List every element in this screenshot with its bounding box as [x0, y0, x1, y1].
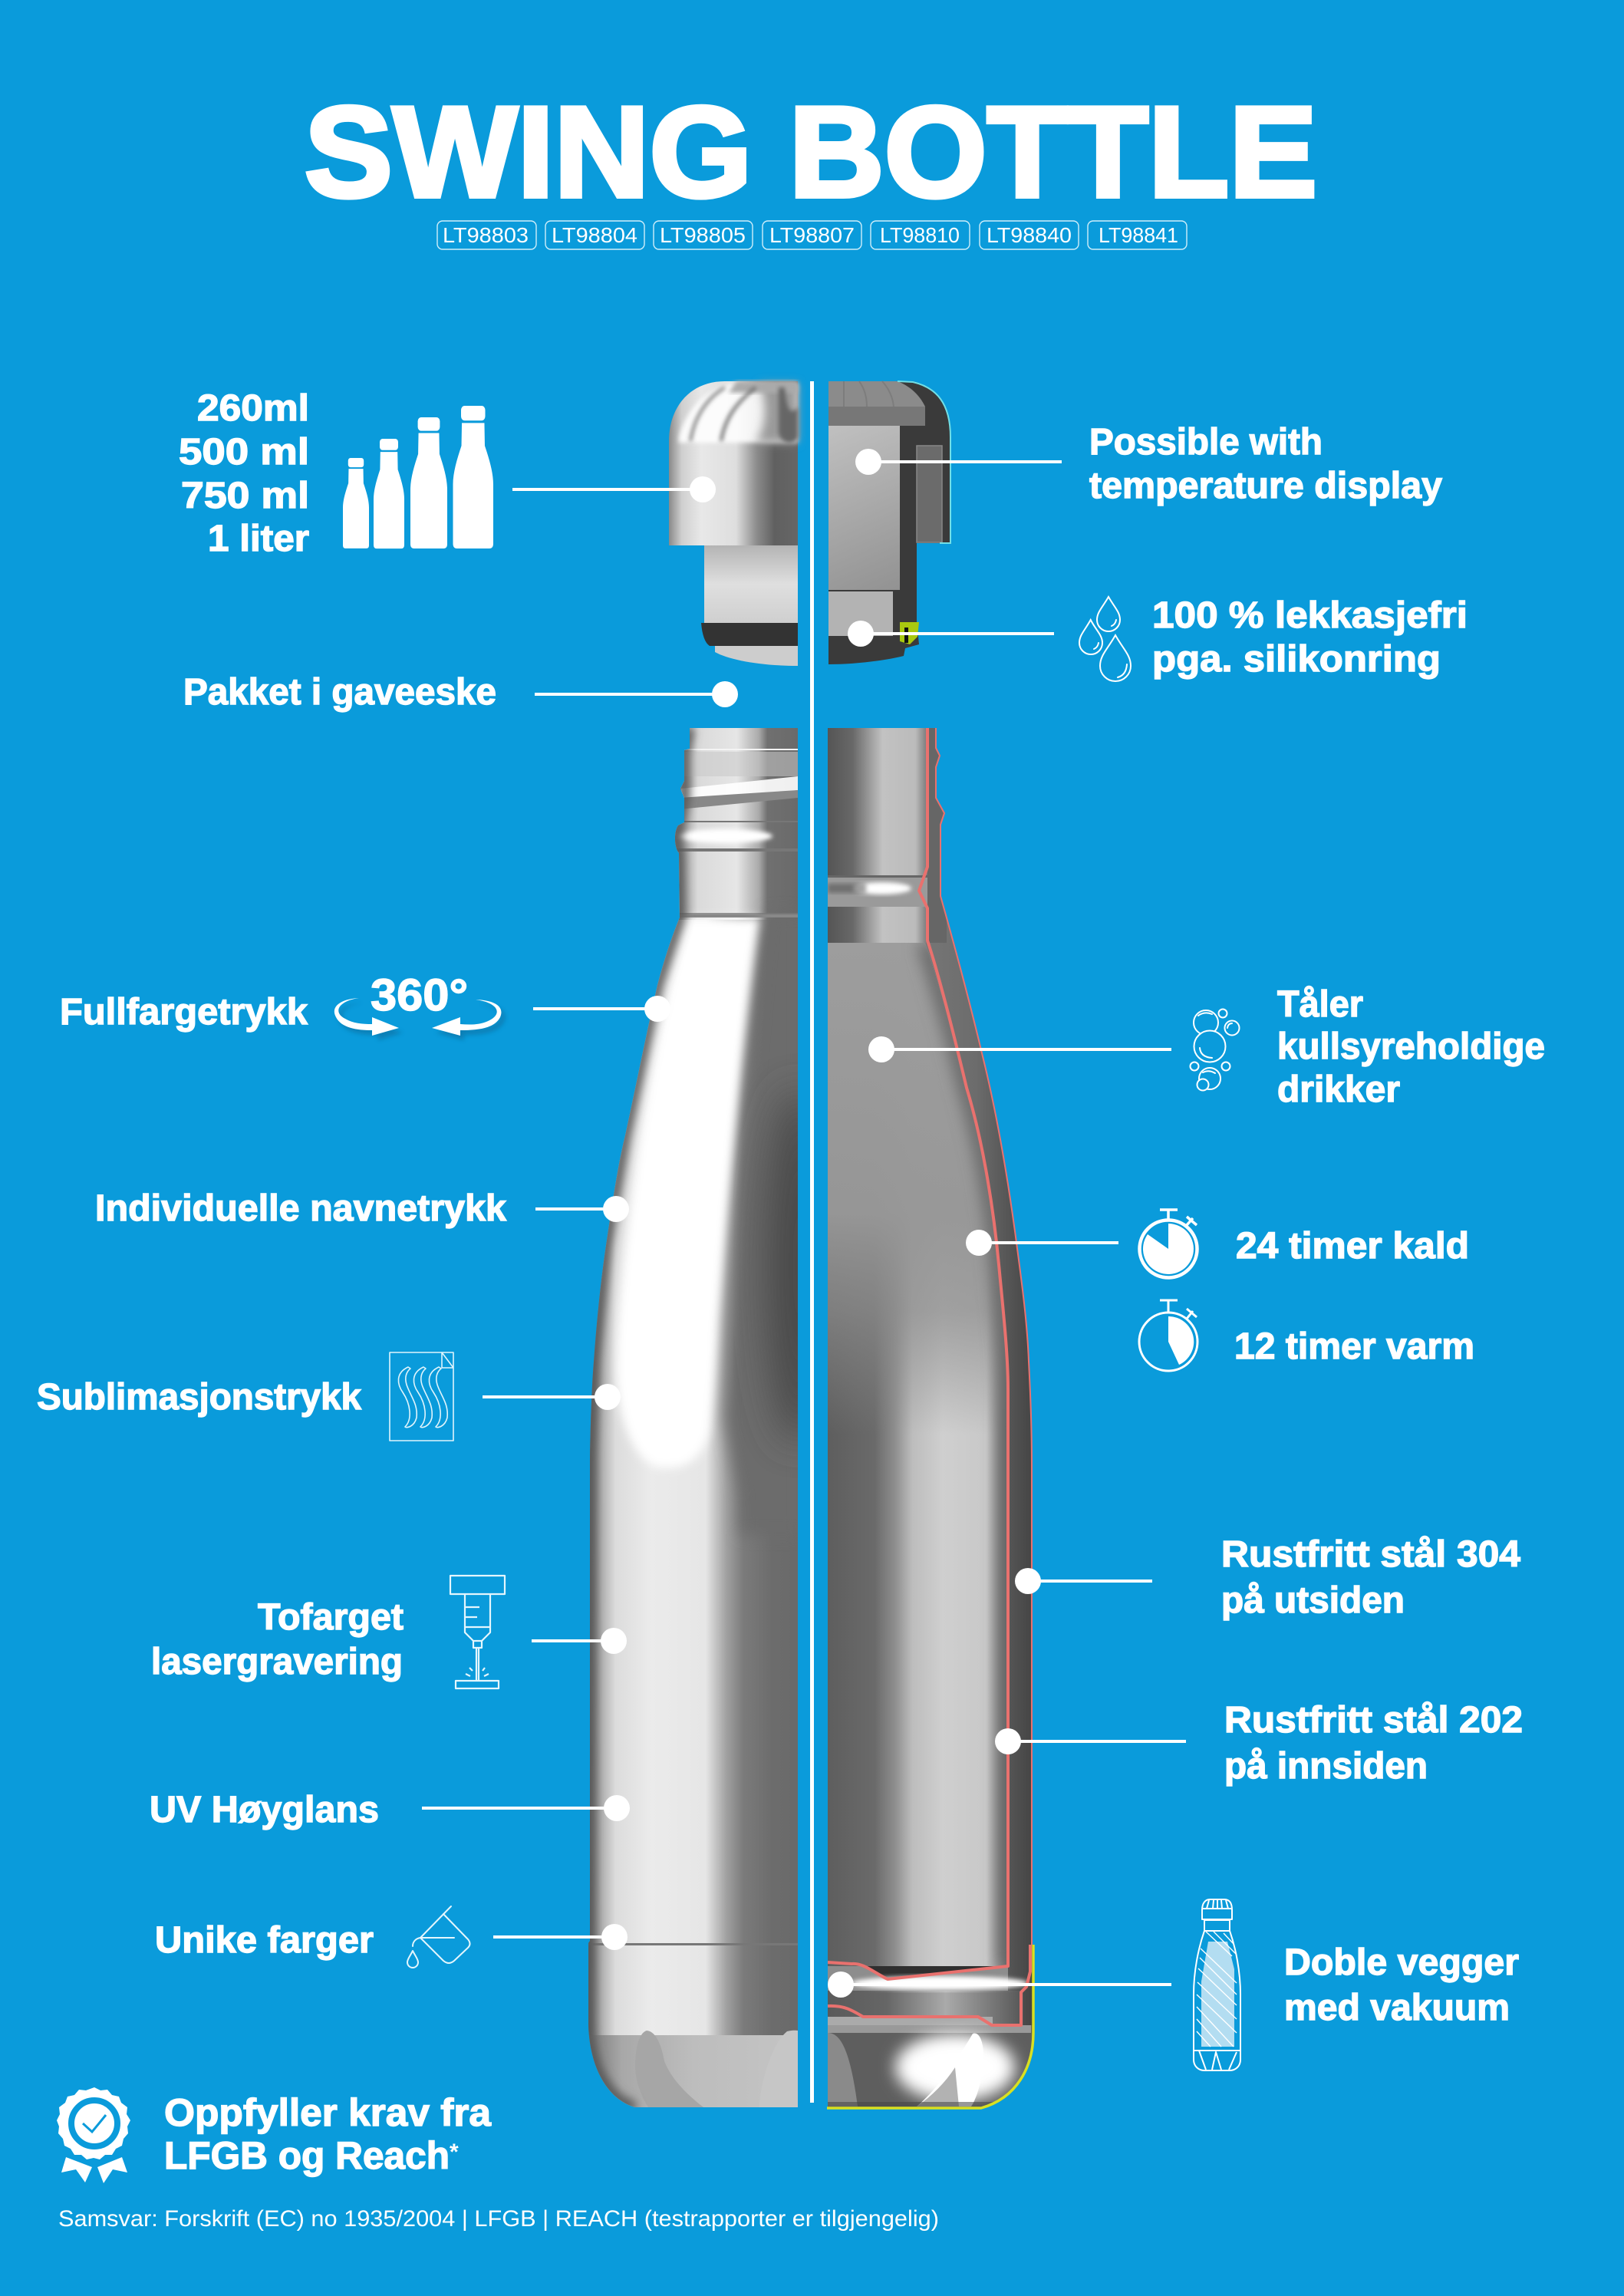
- compliance heading: *: [450, 2140, 459, 2165]
- label: double walls with vacuum: med vakuum: [1284, 1988, 1510, 2028]
- icon: bubbles: [1191, 1010, 1240, 1091]
- product code tags: LT98810: [880, 223, 960, 247]
- label: two-colour laser engraving: lasergravering: [151, 1642, 403, 1682]
- label: individual names: Individuelle navnetrykk: [95, 1188, 506, 1229]
- icon: 360 degrees: [334, 970, 505, 1040]
- label: carbonated drinks: drikker: [1277, 1069, 1400, 1110]
- product code tags: LT98804: [552, 223, 637, 247]
- product code tags: LT98803: [443, 223, 529, 247]
- label: 24 hours cold: 24 timer kald: [1236, 1226, 1469, 1267]
- label: double walls with vacuum: [1284, 1942, 1519, 2028]
- label: leak-proof: [1152, 595, 1468, 680]
- left bottle cap exterior: [669, 381, 798, 666]
- icon: water drops: [1079, 597, 1131, 681]
- icon: four bottle sizes: [343, 406, 493, 548]
- icon: laser engraver: [450, 1576, 505, 1688]
- product code tags: [437, 221, 1187, 249]
- product code tags: LT98841: [1099, 223, 1178, 247]
- compliance footnote: Samsvar: Forskrift (EC) no 1935/2004 | LFGB | REACH (testrapporter er tilgjengelig): [58, 2206, 939, 2232]
- label: carbonated drinks: [1277, 984, 1545, 1110]
- label: stainless steel 202: Rustfritt stål 202: [1224, 1700, 1523, 1741]
- compliance heading: Oppfyller krav fra: [164, 2091, 492, 2134]
- icon: double wall bottle: [1194, 1899, 1240, 2070]
- label: leak-proof: 100 % lekkasjefri: [1152, 595, 1468, 636]
- label: unique colours: Unike farger: [155, 1920, 374, 1961]
- label: carbonated drinks: kullsyreholdige: [1277, 1026, 1545, 1067]
- label: stainless steel 202: på innsiden: [1224, 1746, 1428, 1787]
- right bottle cross-section: [828, 728, 1043, 2110]
- icon: certification badge: [57, 2087, 130, 2183]
- capacity labels: 260ml: [197, 388, 309, 429]
- right bottle cap cross-section: [828, 381, 950, 664]
- icon: stopwatch 12 hours: [1139, 1300, 1197, 1371]
- icon: paint bucket: [407, 1906, 469, 1968]
- label: temperature display: Possible with: [1089, 422, 1323, 463]
- center divider line: [810, 381, 814, 2103]
- capacity labels: [179, 388, 309, 559]
- callout lines and dots: [422, 449, 1186, 1998]
- label: UV high gloss: UV Høyglans: [150, 1790, 379, 1830]
- capacity labels: 750 ml: [181, 476, 309, 516]
- compliance heading: LFGB og Reach: [164, 2134, 450, 2177]
- label: two-colour laser engraving: [151, 1597, 404, 1682]
- product code tags: LT98805: [660, 223, 746, 247]
- compliance heading: [164, 2091, 492, 2177]
- label: temperature display: [1089, 422, 1442, 506]
- icon: 360 degrees: 360°: [371, 970, 468, 1020]
- label: double walls with vacuum: Doble vegger: [1284, 1942, 1519, 1983]
- label: stainless steel 304: på utsiden: [1221, 1580, 1405, 1621]
- label: sublimation: Sublimasjonstrykk: [37, 1377, 361, 1418]
- product code tags: LT98807: [769, 223, 855, 247]
- title: SWING BOTTLE: [305, 80, 1317, 224]
- capacity labels: 500 ml: [179, 432, 309, 473]
- label: leak-proof: pga. silikonring: [1152, 639, 1441, 680]
- label: temperature display: temperature display: [1089, 466, 1442, 506]
- icon: sublimation sheet: [390, 1352, 453, 1441]
- inner wall and outer wall outlines: [828, 728, 1032, 2025]
- icon: stopwatch 24 hours: [1140, 1210, 1197, 1278]
- label: full colour print: Fullfargetrykk: [60, 992, 308, 1033]
- label: carbonated drinks: Tåler: [1277, 984, 1363, 1025]
- label: stainless steel 304: [1221, 1534, 1520, 1621]
- product code tags: LT98840: [987, 223, 1072, 247]
- outer steel outline yellow: [827, 1945, 1033, 2108]
- label: two-colour laser engraving: Tofarget: [258, 1597, 404, 1638]
- label: stainless steel 304: Rustfritt stål 304: [1221, 1534, 1520, 1575]
- label: stainless steel 202: [1224, 1700, 1523, 1787]
- capacity labels: 1 liter: [208, 519, 309, 559]
- label: gift box: Pakket i gaveeske: [183, 672, 496, 713]
- left bottle exterior: [588, 728, 798, 2107]
- label: 12 hours warm: 12 timer varm: [1234, 1326, 1474, 1367]
